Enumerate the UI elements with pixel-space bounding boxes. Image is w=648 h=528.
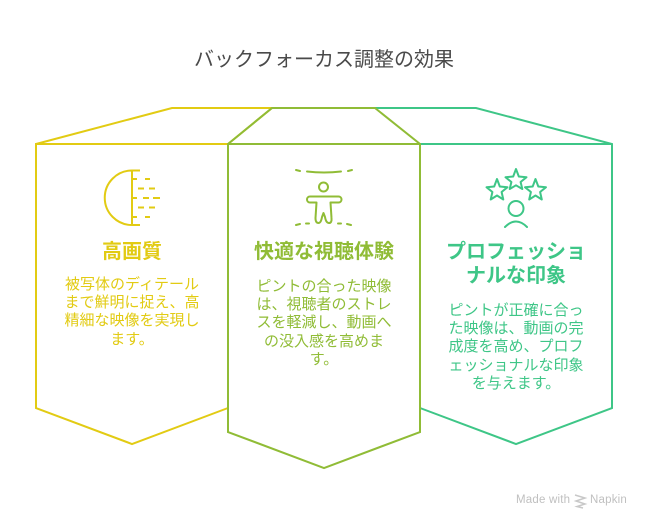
text: comfortable viewing: の没入感を高めま bbox=[264, 333, 384, 350]
text: image quality: 被写体のディテール bbox=[65, 276, 199, 293]
text: image quality: ます。 bbox=[110, 331, 154, 348]
text: professional impression: ェッショナルな印象 bbox=[448, 357, 584, 374]
text: image quality bbox=[64, 276, 200, 348]
text: comfortable viewing: ピントの合った映像 bbox=[256, 278, 392, 295]
heading: image quality: 高画質 bbox=[102, 241, 162, 263]
text: professional impression bbox=[448, 302, 584, 392]
icon: person with arc bbox=[296, 170, 352, 225]
heading: professional impression bbox=[446, 240, 586, 287]
heading: comfortable viewing: 快適な視聴体験 bbox=[254, 241, 394, 263]
text: comfortable viewing: は、視聴者のストレ bbox=[256, 296, 392, 313]
text: comfortable viewing: スを軽減し、動画へ bbox=[256, 314, 392, 331]
watermark: made with Napkin bbox=[516, 494, 627, 506]
text: image quality: まで鮮明に捉え、高 bbox=[64, 294, 200, 311]
icon: Napkin logo bbox=[575, 495, 585, 508]
watermark: made with Napkin: Napkin bbox=[590, 494, 627, 506]
text: professional impression: た映像は、動画の完 bbox=[448, 320, 584, 337]
watermark: made with Napkin: Made with bbox=[516, 494, 570, 506]
heading: professional impression: ナルな印象 bbox=[466, 265, 566, 287]
panel outline: comfortable viewing bbox=[228, 108, 420, 468]
panel outline: image quality bbox=[36, 108, 272, 444]
heading: professional impression: プロフェッショ bbox=[446, 241, 586, 263]
text: comfortable viewing: す。 bbox=[310, 351, 338, 368]
panel outline: professional impression bbox=[375, 108, 612, 444]
icon: three stars above person bbox=[486, 169, 546, 227]
text: professional impression: ピントが正確に合っ bbox=[448, 302, 584, 319]
text: image quality: 精細な映像を実現し bbox=[64, 312, 200, 329]
text: professional impression: 成度を高め、プロフ bbox=[448, 338, 584, 355]
text: professional impression: を与えます。 bbox=[472, 375, 560, 392]
text: comfortable viewing bbox=[256, 278, 392, 368]
title: バックフォーカス調整の効果 bbox=[194, 49, 454, 71]
icon: half circle with dashes bbox=[105, 170, 160, 225]
